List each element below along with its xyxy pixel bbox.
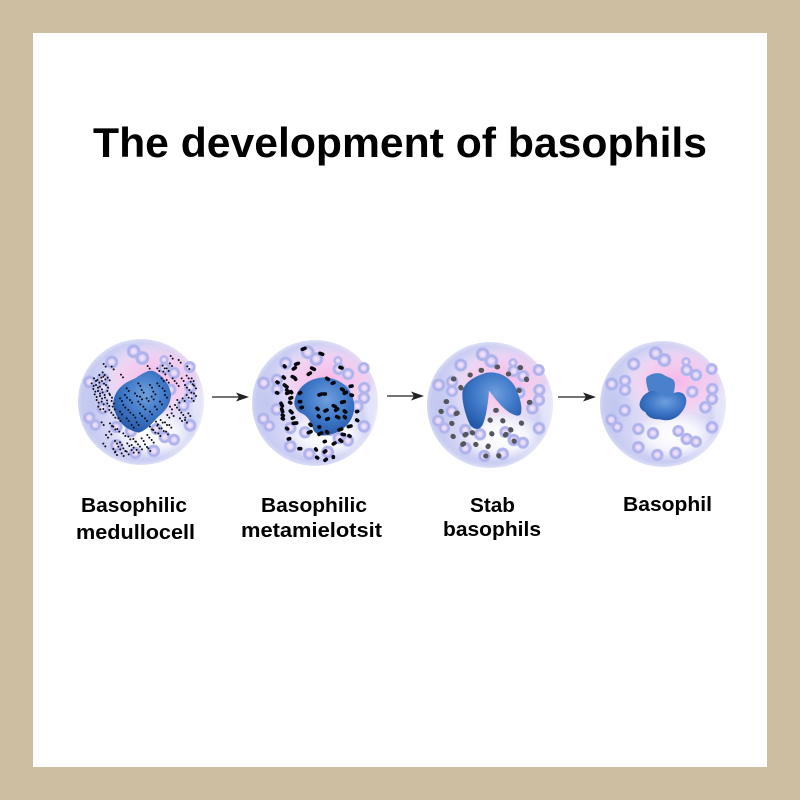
title: The development of basophils — [93, 119, 707, 166]
label: Stab basophils — [443, 495, 541, 541]
nucleus 1 — [113, 371, 171, 433]
nucleus 4 — [640, 373, 686, 420]
arrow 3 — [558, 392, 596, 402]
cell 1: basophilic medullocell — [67, 339, 211, 465]
label: Basophilic metamielotsit: Basophilic — [261, 495, 367, 517]
label: Basophilic medullocell — [76, 495, 195, 544]
nucleus 2 — [294, 377, 354, 435]
arrow 2 — [387, 392, 424, 400]
cell 2: basophilic metamielotsit — [241, 340, 385, 466]
nucleus 3 — [462, 372, 521, 429]
label: Basophilic metamielotsit — [241, 495, 382, 542]
label: Basophilic medullocell: medullocell — [76, 522, 195, 544]
arrow 1 — [212, 392, 249, 402]
cell 4: basophil — [589, 341, 733, 467]
label: Stab basophils: basophils — [443, 519, 541, 541]
granules 3 — [441, 367, 530, 456]
label: Basophilic metamielotsit: metamielotsit — [241, 520, 382, 542]
granules 1 — [92, 356, 196, 456]
label: Basophil: Basophil — [623, 494, 712, 516]
cell 3: stab basophils — [416, 342, 560, 468]
label: Stab basophils: Stab — [470, 495, 515, 517]
label: Basophilic medullocell: Basophilic — [81, 495, 187, 517]
granules 2 — [277, 348, 358, 460]
